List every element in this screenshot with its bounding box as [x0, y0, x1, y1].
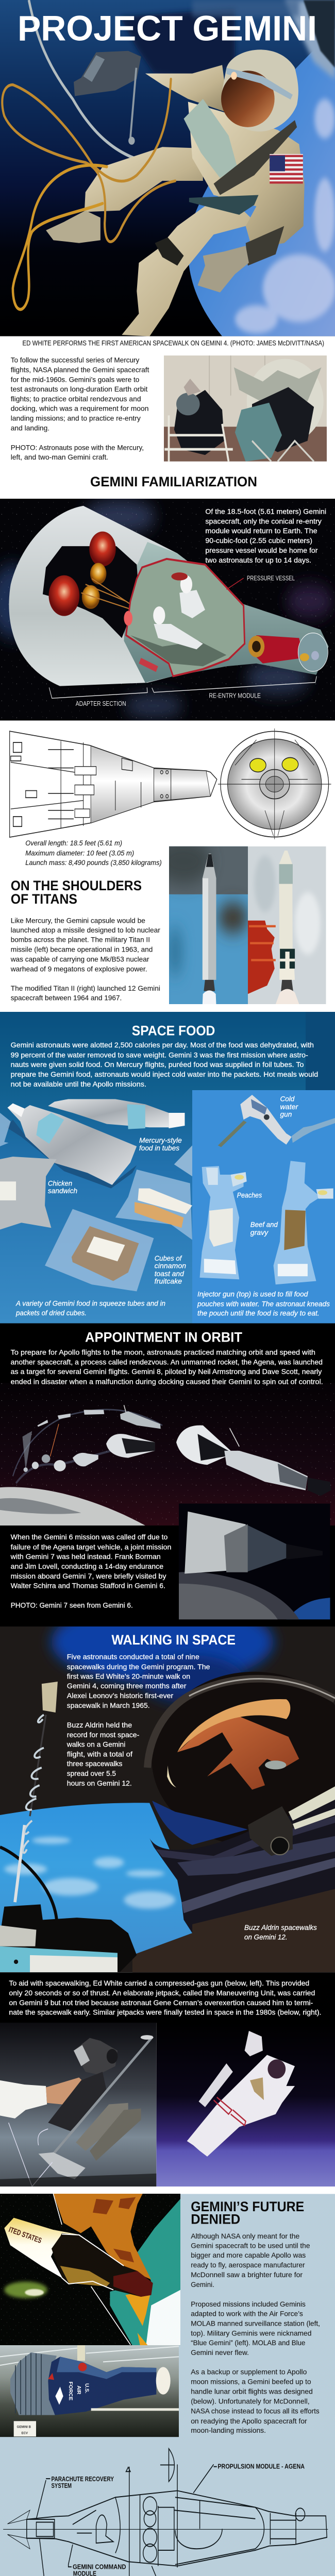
diagram: Gemini Agena lunar vehicle	[3, 2449, 328, 2576]
future text block: Although NASA only meant for the	[191, 2232, 299, 2240]
food labels: cinnamon	[155, 1262, 186, 1270]
rendezvous text block	[11, 1348, 323, 1385]
photo: Blue Gemini: U.S.	[84, 2383, 90, 2394]
Titans text block: Like Mercury, the Gemini capsule would be	[11, 916, 145, 924]
diagram labels: PROPULSION MODULE - AGENA	[217, 2463, 305, 2470]
food photo caption left: A variety of Gemini food in squeeze tubes and in	[15, 1299, 165, 1308]
food labels	[48, 1094, 299, 1285]
Space Food text block: 99 percent of the water removed to save weight. Gemini 3 was the first mission where astro-	[11, 1050, 308, 1059]
future text block: As a backup or supplement to Apollo	[191, 2367, 307, 2376]
food labels: Mercury-style	[139, 1136, 182, 1144]
panel: injector and pouches	[192, 1090, 335, 1323]
Titans text block: launched atop a missile designed to lob nuclear	[11, 926, 160, 934]
food labels: fruitcake	[155, 1277, 182, 1285]
Buzz Aldrin caption: on Gemini 12.	[244, 1933, 288, 1941]
Titans text block: was capable of carrying one Mk/B53 nuclear	[10, 955, 149, 963]
specifications text: Overall length: 18.5 feet (5.61 m)	[25, 839, 122, 847]
intro text block: To follow the successful series of Mercury	[11, 356, 139, 364]
heading: Gemini Familiarization: GEMINI FAMILIARIZATION	[90, 474, 257, 489]
panel: jetpack text band: on Gemini 9 but not tried because astronaut Gene Cernan’s overexertion caused him to termi-	[9, 1998, 313, 2007]
Gemini 6 and 7 text block: failure of the Agena target vehicle, a joint mission	[11, 1543, 171, 1551]
spacewalk text block: spread over 5.5	[67, 1769, 116, 1777]
illustration: MOLAB	[0, 2194, 180, 2345]
future text block: Proposed missions included Geminis	[191, 2300, 306, 2308]
future text block: MOLAB manned surveillance station (left,	[191, 2319, 320, 2327]
photo: Blue Gemini: ECV	[22, 2432, 28, 2435]
hero photo: Ed White spacewalk	[0, 0, 335, 336]
photo: compressed-gas gun	[0, 2023, 156, 2187]
panel: Space Food	[0, 1012, 335, 1323]
spacewalk text block: first was Ed White’s 20-minute walk on	[67, 1672, 190, 1681]
future text block: NASA chose instead to focus all its efforts	[191, 2406, 320, 2415]
future text block: Gemini.	[191, 2280, 214, 2289]
heading: On the Shoulders of Titans: ON THE SHOULDERS	[11, 878, 142, 893]
label: adapter section: ADAPTER SECTION	[76, 700, 126, 707]
cutaway description text	[205, 507, 326, 564]
intro text block: PHOTO: Astronauts pose with the Mercury,	[11, 444, 144, 452]
photo: Buzz Aldrin spacewalk	[0, 1600, 335, 1972]
rendezvous text block: as a target for several Gemini flights. Gemini 8, piloted by Neil Armstrong and Dave Scott, nearly	[11, 1367, 322, 1376]
future text block	[191, 2232, 320, 2434]
heading: Space Food: SPACE FOOD	[132, 1023, 215, 1039]
intro text block: left, and two-man Gemini craft.	[11, 453, 108, 461]
Space Food text block: prepare the Gemini food, astronauts would inject cold water into the packets. Hot meals would	[11, 1070, 318, 1078]
Gemini 6 and 7 text block: PHOTO: Gemini 7 seen from Gemini 6.	[11, 1601, 133, 1609]
Titans text block	[10, 916, 160, 1002]
food photo caption right: the pouch until the food is ready to eat.	[197, 1309, 320, 1317]
heading: On the Shoulders of Titans: OF TITANS	[11, 891, 77, 907]
panel: jetpack text band: To aid with spacewalking, Ed White carried a compressed-gas gun (below, left). This provided	[9, 1979, 309, 1987]
food photo caption left: packets of dried cubes.	[15, 1309, 87, 1317]
future text block: Gemini never flew.	[191, 2348, 249, 2357]
title: PROJECT GEMINI	[18, 8, 317, 48]
Space Food text block	[11, 1041, 318, 1088]
Space Food text block: nauts were given solid food. On Mercury flights, puréed food was supplied in foil tubes. To	[11, 1060, 304, 1069]
cutaway description text: module would return to Earth. The	[205, 527, 317, 535]
intro text block: flights, NASA planned the Gemini spacecraft	[11, 365, 149, 374]
panel: Gemini cutaway illustration	[0, 499, 335, 721]
illustration: rendezvous sequence	[0, 1383, 335, 1526]
label: re-entry module: RE-ENTRY MODULE	[209, 692, 261, 700]
food labels: toast and	[155, 1269, 185, 1278]
food labels: gravy	[250, 1228, 269, 1236]
blueprint: Gemini front view	[218, 728, 331, 839]
Space Food text block: not be available until the Apollo missions.	[11, 1080, 146, 1088]
spacewalk text block: flight, with a total of	[67, 1750, 132, 1758]
heading: Appointment in Orbit: APPOINTMENT IN ORBIT	[85, 1330, 242, 1345]
illustration: MOLAB: ITED STATES	[8, 2226, 43, 2245]
photo: McCandless free-flying jetpack	[156, 2023, 335, 2187]
intro text block: for the mid-1960s. Gemini’s goals were to	[11, 376, 139, 384]
Titans text block: bombs across the planet. The military Titan II	[11, 936, 150, 944]
food photo caption right	[197, 1290, 330, 1317]
heading: Gemini's Future Denied: GEMINI’S FUTURE	[191, 2199, 304, 2214]
spacewalk text block: Buzz Aldrin held the	[67, 1721, 132, 1729]
spacewalk text block: Gemini 4, coming three months after	[67, 1682, 187, 1690]
intro text block: flights; to practice orbital rendezvous and	[11, 395, 141, 403]
future text block: adapted to work with the Air Force’s	[191, 2309, 303, 2317]
heading: Gemini's Future Denied	[191, 2199, 304, 2227]
spacewalk text block: Five astronauts conducted a total of nine	[67, 1653, 199, 1661]
Buzz Aldrin caption: Buzz Aldrin spacewalks	[244, 1923, 317, 1931]
cutaway description text: pressure vessel would be home for	[205, 546, 318, 554]
food labels: Peaches	[237, 1191, 262, 1199]
spacewalk text block: walks on a Gemini	[66, 1740, 125, 1749]
spacewalk text block: spacewalks during the Gemini program. The	[67, 1663, 210, 1671]
spacewalk text block	[66, 1653, 210, 1787]
Gemini 6 and 7 text block: with Gemini 7 was held instead. Frank Borman	[10, 1552, 161, 1561]
Gemini 6 and 7 text block	[10, 1533, 172, 1609]
future text block: moon-landing missions.	[191, 2426, 266, 2434]
food photo caption right: pouches with water. The astronaut kneads	[197, 1300, 330, 1308]
rendezvous text block: ended in disaster when a malfunction during docking caused their Gemini to spin out of control.	[11, 1377, 323, 1385]
future text block: “Blue Gemini” (left). MOLAB and Blue	[191, 2338, 306, 2347]
Gemini 6 and 7 text block: and Jim Lovell, conducting a 14-day endurance	[11, 1562, 163, 1570]
future text block: McDonnell saw a brighter future for	[191, 2270, 303, 2279]
Gemini 6 and 7 text block: mission aboard Gemini 7, were briefly visited by	[11, 1572, 166, 1580]
photo: Blue Gemini: GEMINI B	[17, 2426, 31, 2429]
heading: Walking in Space: WALKING IN SPACE	[111, 1632, 236, 1648]
spacewalk text block: hours on Gemini 12.	[67, 1779, 132, 1787]
food labels: Cubes of	[155, 1254, 182, 1262]
photo: Blue Gemini	[0, 2345, 179, 2437]
panel: jetpack text band: only 20 seconds or so of thrust. An elaborate jetpack, called the Maneuvering Unit, was carried	[9, 1989, 315, 1997]
Titans text block: The modified Titan II (right) launched 12 Gemini	[11, 984, 160, 992]
blueprint: Gemini side view	[10, 731, 217, 837]
future text block: Gemini spacecraft to be used until the	[191, 2241, 310, 2249]
photo: Blue Gemini: AIR	[76, 2385, 81, 2395]
future text block: moon missions, a Gemini beefed up to	[191, 2378, 311, 2386]
food labels: food in tubes	[139, 1144, 179, 1152]
specifications text	[25, 839, 162, 867]
diagram labels: SYSTEM	[52, 2482, 72, 2489]
diagram labels: GEMINI COMMAND	[73, 2564, 126, 2571]
specifications text: Launch mass: 8,490 pounds (3,850 kilograms)	[25, 858, 162, 867]
panel: jetpack text band: nate the spacewalk early. Similar jetpacks were finally tested in space in the 1980s (below, right).	[9, 2008, 321, 2016]
cutaway description text: two astronauts for up to 14 days.	[205, 556, 311, 564]
rendezvous text block: To prepare for Apollo flights to the moon, astronauts practiced matching orbit and speed with	[11, 1348, 315, 1356]
future text block: on readying the Apollo spacecraft for	[191, 2417, 307, 2425]
Titans text block: spacecraft between 1964 and 1967.	[11, 994, 122, 1002]
specifications text: Maximum diameter: 10 feet (3.05 m)	[25, 849, 134, 857]
food photo caption right: Injector gun (top) is used to fill food	[197, 1290, 309, 1298]
Buzz Aldrin caption	[244, 1923, 317, 1941]
food photo caption left	[15, 1299, 165, 1317]
photo: Gemini-Titan launch	[248, 846, 326, 1004]
Space Food text block: Gemini astronauts were alotted 2,500 calories per day. Most of the food was dehydrated, with	[11, 1041, 314, 1049]
food labels: Cold	[280, 1094, 295, 1103]
panel: Appointment in Orbit	[0, 1323, 335, 1626]
photo: food tubes and packets	[0, 1099, 192, 1292]
photo: Gemini 7 seen from Gemini 6	[179, 1503, 330, 1619]
diagram labels: PARACHUTE RECOVERY	[52, 2476, 114, 2483]
food labels: sandwich	[48, 1187, 77, 1195]
panel: Gemini's Future Denied	[0, 2194, 335, 2576]
food labels: Beef and	[250, 1220, 278, 1228]
photo: Mercury and Gemini craft	[164, 355, 327, 462]
heading: Gemini's Future Denied: DENIED	[191, 2212, 240, 2227]
cutaway description text: spacecraft, only the conical re-entry	[205, 517, 322, 525]
future text block: top). Military Geminis were nicknamed	[191, 2329, 311, 2337]
cutaway description text: 90-cubic-foot (2.55 cubic meters)	[205, 536, 312, 545]
future text block: bigger and more capable Apollo was	[191, 2251, 306, 2259]
rendezvous text block: another spacecraft, a process called rendezvous. An unmanned rocket, the Agena, was launched	[11, 1358, 323, 1366]
Gemini 6 and 7 text block: Walter Schirra and Thomas Stafford in Gemini 6.	[11, 1581, 165, 1589]
intro text block: and landing.	[11, 423, 49, 432]
label: pressure vessel: PRESSURE VESSEL	[247, 574, 295, 582]
future text block: ready to fly, aerospace manufacturer	[191, 2261, 305, 2269]
photo: Blue Gemini: FORCE	[68, 2382, 73, 2401]
spacewalk text block: record for most space-	[67, 1731, 140, 1739]
intro text block: landing missions; and to practice re-entry	[11, 414, 141, 422]
food labels: gun	[280, 1110, 292, 1118]
intro text block: docking, which was a requirement for moon	[11, 404, 148, 412]
Titans text block: missile (left) became operational in 1963, and	[11, 945, 153, 953]
diagram labels	[52, 2463, 305, 2576]
cutaway description text: Of the 18.5-foot (5.61 meters) Gemini	[205, 507, 326, 516]
photo: Titan II missile	[169, 846, 248, 1004]
heading: On the Shoulders of Titans	[11, 878, 142, 907]
spacewalk text block: three spacewalks	[67, 1759, 123, 1768]
panel: jetpack text band	[0, 1972, 335, 2023]
spacewalk text block: spacewalk in March 1965.	[67, 1701, 150, 1709]
panel: Walking in Space	[0, 1600, 335, 1972]
future text block: (below). Unfortunately for McDonnell,	[191, 2397, 310, 2405]
intro text block	[11, 356, 149, 461]
Gemini 6 and 7 text block: When the Gemini 6 mission was called off due to	[11, 1533, 168, 1541]
food labels: water	[280, 1103, 299, 1111]
spacewalk text block: Alexei Leonov’s historic first-ever	[67, 1691, 174, 1700]
Titans text block: warhead of 9 megatons of explosive power.	[10, 965, 147, 973]
future text block: handle lunar orbit flights was designed	[191, 2387, 313, 2396]
food labels: Chicken	[48, 1179, 72, 1187]
intro text block: test astronauts on long-duration Earth orbit	[11, 385, 147, 393]
